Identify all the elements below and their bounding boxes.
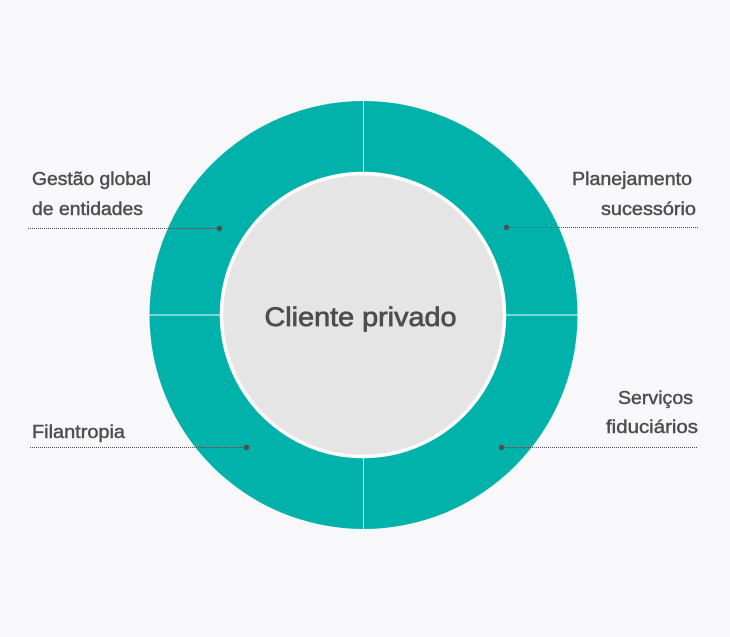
center circle — [222, 174, 504, 456]
callout: Serviços fiduciários: Serviços — [618, 388, 693, 408]
callout: Planejamento sucessório: Planejamento — [572, 169, 692, 189]
callout: Serviços fiduciários: fiduciários — [606, 417, 698, 437]
callout: Filantropia — [30, 422, 249, 450]
callout: Gestão global de entidades — [28, 169, 222, 231]
ring: four teal service segments — [150, 101, 578, 529]
center label: Cliente privado — [264, 302, 456, 332]
callout: Serviços fiduciários — [499, 388, 698, 450]
callout: Gestão global de entidades: Gestão global — [32, 169, 151, 189]
callout: Planejamento sucessório: sucessório — [601, 199, 696, 219]
callout: Planejamento sucessório — [504, 169, 698, 230]
callout: Filantropia: Filantropia — [32, 422, 126, 442]
callout: Gestão global de entidades: de entidades — [32, 199, 143, 219]
